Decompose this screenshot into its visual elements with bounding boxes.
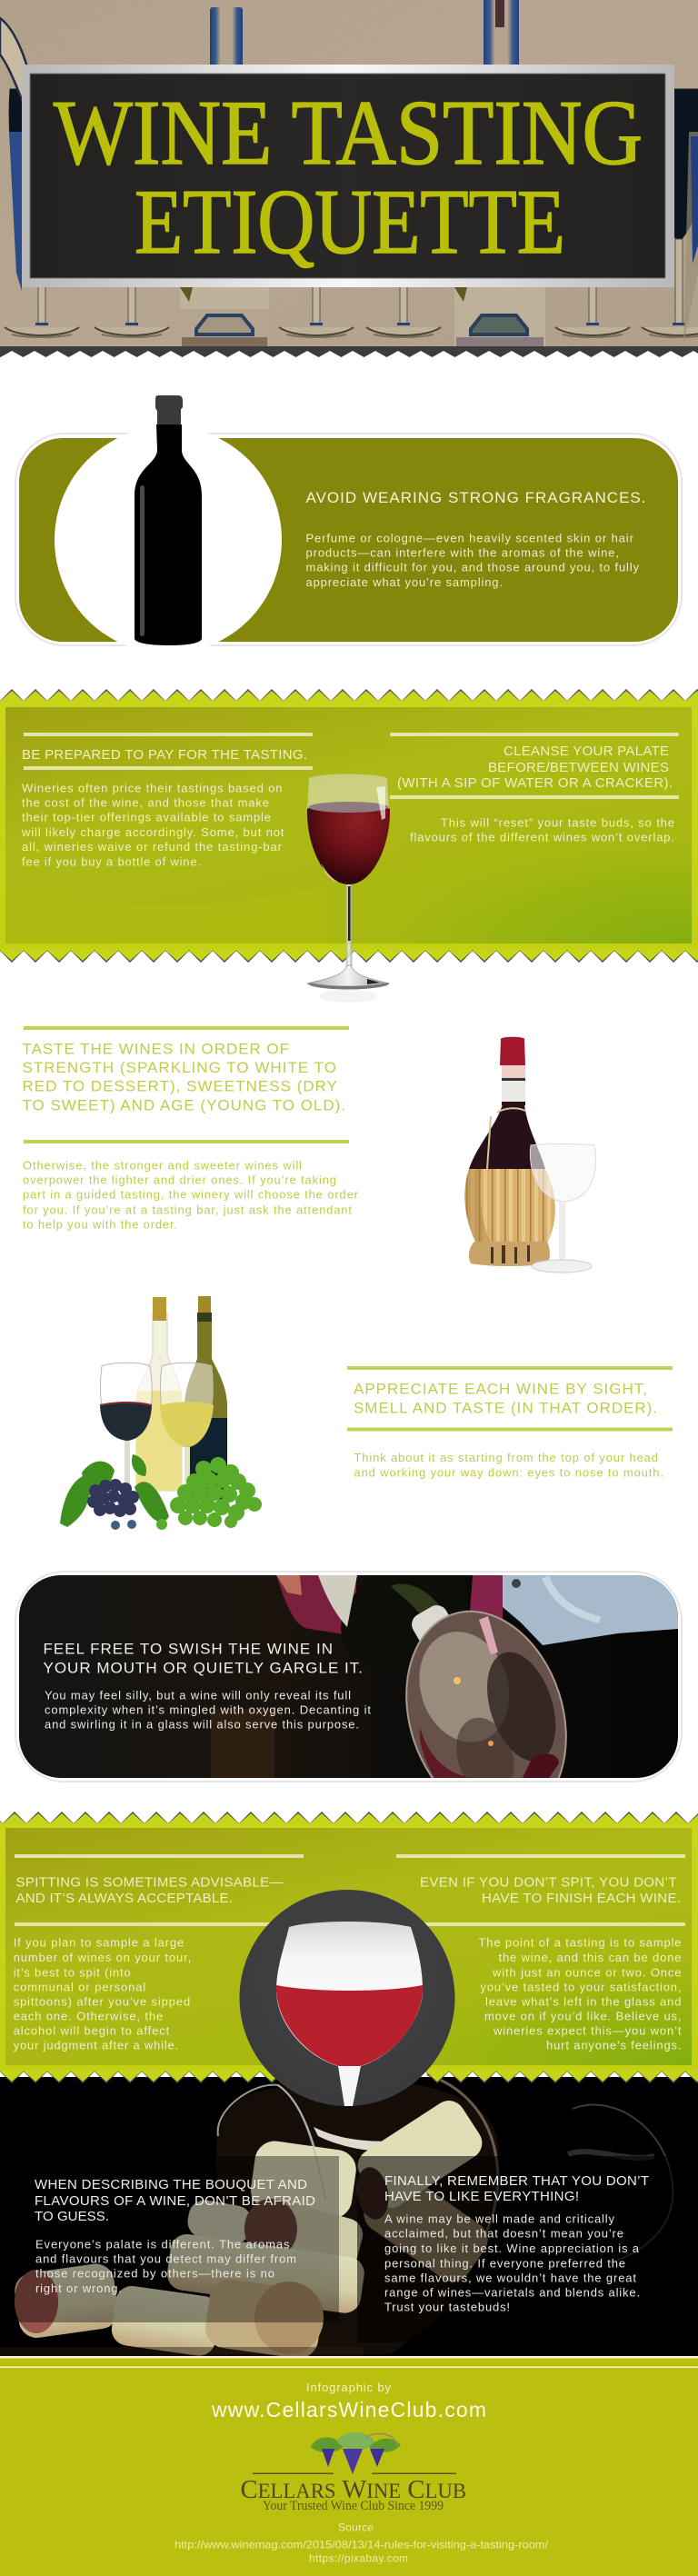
body: be prepared: all, wineries waive or refund the tasting-bar (22, 840, 283, 854)
body: finally: same flavours, we wouldn’t have the great (384, 2271, 636, 2285)
body: describing (35, 2238, 296, 2295)
heading: TO SWEET) AND AGE (YOUNG TO OLD). (22, 1096, 345, 1114)
body (23, 1158, 359, 1231)
heading: finally: HAVE TO LIKE EVERYTHING! (384, 2189, 579, 2204)
body: finally: personal thing. If everyone preferred the (384, 2256, 625, 2271)
heading (22, 1040, 345, 1114)
body: cleanse (410, 816, 674, 844)
photo: wine being poured into glass (19, 1575, 678, 1778)
white bottle (136, 1313, 182, 1491)
heading: finally: FINALLY, REMEMBER THAT YOU DON’T (384, 2173, 649, 2189)
translucent text box left (15, 2156, 339, 2322)
heading: finish (420, 1874, 681, 1906)
body: finish: wineries expect this—you won’t (493, 2023, 682, 2038)
panel: swish the wine (15, 1571, 683, 1782)
body: spitting: number of wines on your tour, (14, 1951, 191, 1964)
body: complexity when it’s mingled with oxygen. Decanting it (45, 1703, 371, 1716)
body: finish: The point of a tasting is to sample (478, 1936, 682, 1949)
heading: spitting: SPITTING IS SOMETIMES ADVISABLE— (16, 1874, 284, 1891)
logo: grapes (311, 2432, 401, 2474)
translucent text box right (357, 2156, 681, 2342)
photo: straw-wrapped chianti bottle and glass (464, 1037, 596, 1273)
left rules (24, 733, 313, 770)
photo: corks spilling from glass jar (0, 2074, 673, 2361)
body: finally: going to like it best. Wine appreciation is a (384, 2242, 640, 2255)
body: spitting (14, 1936, 191, 2052)
body: finally: range of wines—varietals and blends alike. (384, 2285, 640, 2300)
body: spitting: each one. Otherwise, the (14, 2009, 163, 2023)
body: finally: acclaimed, but that doesn’t mean you’re (384, 2227, 623, 2240)
heading: finish: HAVE TO FINISH EACH WINE. (482, 1891, 681, 1906)
heading: cleanse (397, 744, 673, 791)
heading: describing: WHEN DESCRIBING THE BOUQUET AND (35, 2177, 307, 2192)
heading: cleanse: CLEANSE YOUR PALATE (504, 744, 669, 759)
heading: describing: FLAVOURS OF A WINE, DON’T BE AFRAID (35, 2193, 315, 2209)
heading: AVOID WEARING STRONG FRAGRANCES. (305, 489, 645, 506)
header zigzag edge (0, 346, 698, 357)
website url: www.CellarsWineClub.com (211, 2398, 486, 2421)
body: finally (384, 2212, 640, 2314)
heading: STRENGTH (SPARKLING TO WHITE TO (22, 1059, 336, 1076)
heading: finish: EVEN IF YOU DON’T SPIT, YOU DON’T (420, 1874, 676, 1891)
body: finish: the wine, and this can be done (498, 1951, 682, 1964)
wine glasses row (5, 89, 698, 345)
body: cleanse: flavours of the different wines won’t overlap. (410, 831, 674, 844)
body: finish (478, 1936, 682, 2052)
logo: rules (253, 2472, 456, 2474)
credit: Infographic by (306, 2381, 391, 2394)
panel: green band pay / cleanse (0, 689, 698, 963)
panel: corks photo section (0, 2074, 698, 2361)
body: finish: with just an ounce or two. Once (492, 1965, 682, 1980)
dark grapes (87, 1479, 139, 1530)
body: Otherwise, the stronger and sweeter wines will (23, 1158, 302, 1173)
section: taste in order (22, 1026, 359, 1231)
heading: RED TO DESSERT), SWEETNESS (DRY (22, 1078, 337, 1094)
body: cleanse: This will “reset” your taste buds, so the (441, 816, 674, 829)
body: spitting: spittoons) after you’ve sipped (14, 1994, 190, 2009)
body: be prepared: the cost of the wine, and those that make (22, 796, 269, 809)
heading: spitting (16, 1874, 284, 1906)
white circle (55, 426, 282, 654)
white wine glass (160, 1363, 213, 1447)
heading: describing (35, 2177, 315, 2224)
body: describing: and flavours that you detect may differ from (35, 2252, 296, 2265)
footer panel (0, 2356, 698, 2576)
pixabay link: https://pixabay.com (309, 2552, 408, 2565)
body text: making it difficult for you, and those around you, to fully (305, 560, 640, 574)
body: You may feel silly, but a wine will only reveal its full (45, 1689, 351, 1702)
body: and swirling it in a glass will also serve this purpose. (45, 1718, 359, 1731)
pouring wine stream (0, 16, 27, 103)
body: for you. If you’re at a tasting bar, just ask the attendant (23, 1203, 352, 1216)
title: ETIQUETTE (135, 171, 565, 274)
heading: FEEL FREE TO SWISH THE WINE IN (44, 1640, 333, 1658)
body: finally: Trust your tastebuds! (384, 2300, 510, 2314)
heading: cleanse: (WITH A SIP OF WATER OR A CRACKER). (397, 775, 673, 791)
heading: be prepared: BE PREPARED TO PAY FOR THE TASTING. (22, 747, 307, 763)
section: appreciate each wine (347, 1366, 673, 1480)
body: to help you with the order. (23, 1218, 177, 1231)
body: describing: those recognized by others—there is no (35, 2267, 274, 2280)
icon: black wine bottle (135, 395, 202, 645)
body: be prepared: fee if you buy a bottle of wine. (22, 854, 201, 869)
icon: red wine glass (307, 774, 390, 1003)
source link: http://www.winemag.com/2015/08/13/14-rules-for-visiting-a-tasting-room/ (174, 2538, 549, 2551)
body: spitting: it’s best to spit (into (14, 1965, 131, 1980)
icon: wine glass in dark circle (240, 1890, 454, 2106)
heading: SMELL AND TASTE (IN THAT ORDER). (354, 1400, 657, 1416)
body: overpower the lighter and drier ones. If you’re taking (23, 1173, 336, 1187)
body (354, 1451, 663, 1480)
body: finish: you’ve tasted to your satisfaction, (480, 1980, 682, 1994)
heading: spitting: AND IT’S ALWAYS ACCEPTABLE. (16, 1891, 233, 1906)
photo: white wine, red wine, glasses and grapes (60, 1296, 262, 1530)
body: part in a guided tasting, the winery will choose the order (23, 1187, 359, 1202)
title: WINE TASTING (54, 82, 643, 185)
body: spitting: If you plan to sample a large (14, 1936, 184, 1949)
heading (44, 1640, 363, 1676)
header photo: bottles and glasses (0, 0, 698, 346)
body: finally: A wine may be well made and critically (384, 2212, 614, 2225)
leaves (60, 1454, 169, 1527)
bottle right (454, 0, 545, 346)
left rules (15, 1854, 304, 1926)
source label: Source (338, 2521, 374, 2534)
body: spitting: your judgment after a while. (14, 2038, 178, 2052)
body: Think about it as starting from the top of your head (354, 1451, 658, 1464)
heading: finally (384, 2173, 649, 2204)
body: spitting: alcohol will begin to affect (14, 2023, 170, 2038)
body: finish: hurt anyone’s feelings. (546, 2038, 682, 2052)
bottle left (180, 7, 269, 346)
body text (305, 531, 640, 589)
logo: tagline: Your Trusted Wine Club Since 1999 (263, 2499, 444, 2513)
right rules (396, 1854, 685, 1926)
olive bottle (184, 1320, 227, 1500)
heading: YOUR MOUTH OR QUIETLY GARGLE IT. (44, 1660, 363, 1676)
body: be prepared: will likely charge accordingly. Some, but not (21, 825, 284, 839)
body: be prepared: their top-tier offerings available to sample (22, 811, 271, 824)
heading: APPRECIATE EACH WINE BY SIGHT, (354, 1380, 647, 1398)
body: describing: right or wrong. (35, 2281, 122, 2295)
heading: TASTE THE WINES IN ORDER OF (22, 1040, 289, 1058)
logo: wordmark: CELLARS WINE CLUB (240, 2475, 466, 2504)
title (54, 82, 643, 274)
heading: describing: TO GUESS. (35, 2209, 109, 2224)
body: spitting: communal or personal (14, 1980, 145, 1994)
body: be prepared (21, 782, 284, 869)
heading (354, 1380, 657, 1416)
body: and working your way down: eyes to nose to mouth. (354, 1465, 663, 1480)
heading: cleanse: BEFORE/BETWEEN WINES (488, 760, 669, 775)
body: describing: Everyone’s palate is different. The aromas (35, 2238, 290, 2251)
title panel (22, 65, 674, 287)
body: be prepared: Wineries often price their tastings based on (22, 782, 282, 794)
body (45, 1689, 371, 1731)
body: finish: leave what’s left in the glass and (485, 1994, 682, 2009)
body text: Perfume or cologne—even heavily scented skin or hair (305, 531, 634, 545)
panel: avoid strong fragrances (15, 395, 682, 654)
body text: appreciate what you’re sampling. (305, 575, 503, 589)
body: finish: move on if you’d like. Believe us, (484, 2009, 682, 2023)
red wine glass (100, 1363, 152, 1441)
right rules (390, 733, 679, 799)
green grapes (156, 1457, 262, 1530)
panel: green band spit / finish (0, 1812, 698, 2083)
body text: products—can interfere with the aromas of the wine, (305, 545, 619, 560)
